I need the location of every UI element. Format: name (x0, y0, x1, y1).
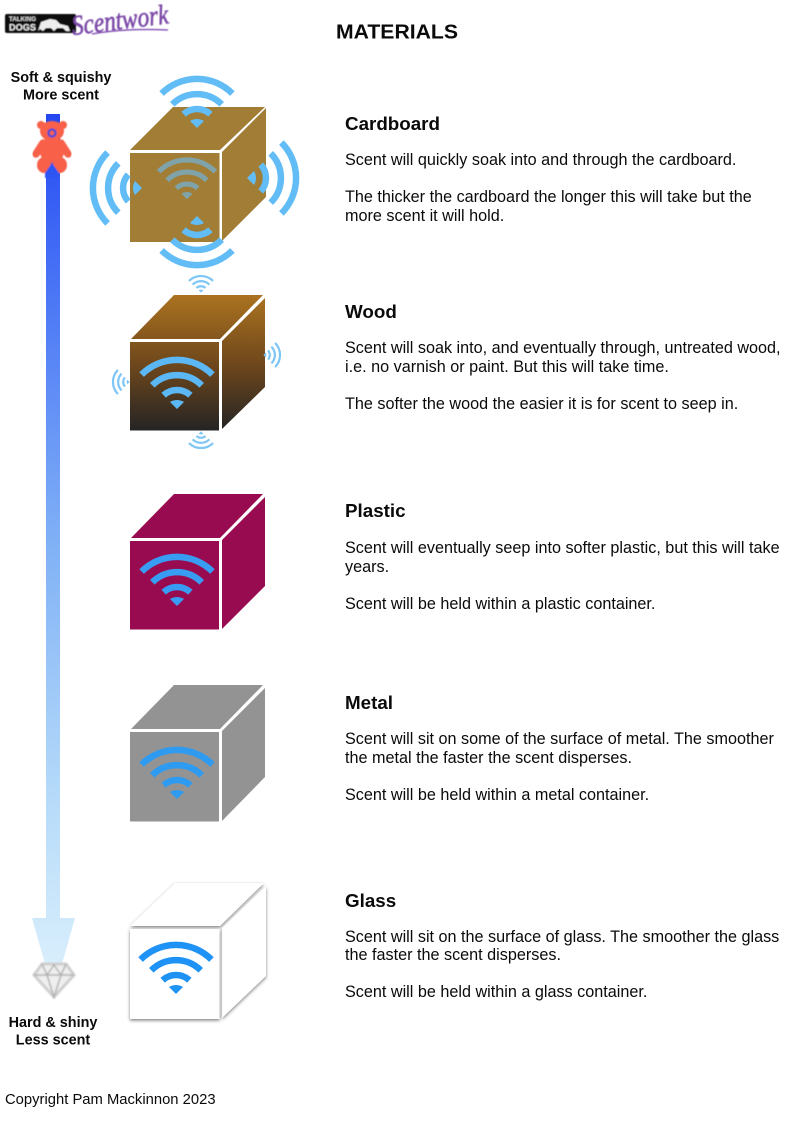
text block: metal (345, 692, 774, 804)
top scale label: More scent (23, 88, 99, 104)
text block: wood (345, 301, 781, 413)
text block: glass: Scent will sit on the surface of glass. The smoother the glass (345, 928, 779, 946)
wifi icon: wood front (142, 360, 212, 409)
text block: metal: Metal (345, 692, 393, 713)
top scale label: Soft & squishy (11, 70, 111, 86)
wifi icon: glass front (141, 945, 211, 994)
text block: cardboard: Cardboard (345, 113, 440, 134)
text block: metal: the metal the faster the scent disperses. (345, 749, 632, 767)
cube: glass (130, 883, 266, 1019)
text block: metal: Scent will sit on some of the surface of metal. The smoother (345, 730, 774, 748)
text block: cardboard: The thicker the cardboard the longer this will take but the (345, 188, 752, 206)
text block: wood: The softer the wood the easier it is for scent to seep in. (345, 395, 738, 413)
text block: wood: Scent will soak into, and eventually through, untreated wood, (345, 339, 781, 357)
text block: plastic (345, 500, 780, 613)
icon: teddy bear (36, 121, 68, 178)
bottom scale label: Less scent (16, 1032, 90, 1048)
text block: glass: Scent will be held within a glass container. (345, 983, 647, 1001)
signal waves: wood (113, 276, 280, 448)
text block: glass: Glass (345, 890, 396, 911)
text block: plastic: Scent will eventually seep into softer plastic, but this will take (345, 539, 780, 557)
text block: cardboard: Scent will quickly soak into and through the cardboard. (345, 151, 736, 169)
wifi icon: cardboard front (159, 160, 215, 199)
text block: cardboard: more scent it will hold. (345, 207, 504, 225)
logo (5, 0, 171, 42)
signal waves: cardboard (93, 79, 296, 265)
text block: glass (345, 890, 779, 1001)
logo: DOGS (9, 22, 36, 34)
wifi icon: plastic front (142, 557, 212, 606)
cube: cardboard (93, 79, 296, 265)
icon: diamond (34, 964, 74, 997)
copyright: Copyright Pam Mackinnon 2023 (5, 1092, 216, 1108)
text block: cardboard (345, 113, 752, 225)
text block: plastic: Plastic (345, 500, 406, 521)
text block: glass: the faster the scent disperses. (345, 946, 561, 964)
cube: plastic (130, 494, 265, 630)
text block: plastic: years. (345, 558, 389, 576)
cube: wood (113, 276, 280, 448)
title: MATERIALS (336, 22, 458, 44)
logo: TALKING (9, 17, 36, 23)
wifi icon: metal front (142, 750, 212, 799)
text block: plastic: Scent will be held within a plastic container. (345, 595, 655, 613)
text block: wood: Wood (345, 301, 397, 322)
cube: metal (130, 685, 265, 822)
text block: metal: Scent will be held within a metal container. (345, 786, 649, 804)
bottom scale label: Hard & shiny (9, 1015, 97, 1031)
gradient arrow (32, 114, 75, 964)
text block: wood: i.e. no varnish or paint. But this will take time. (345, 358, 669, 376)
